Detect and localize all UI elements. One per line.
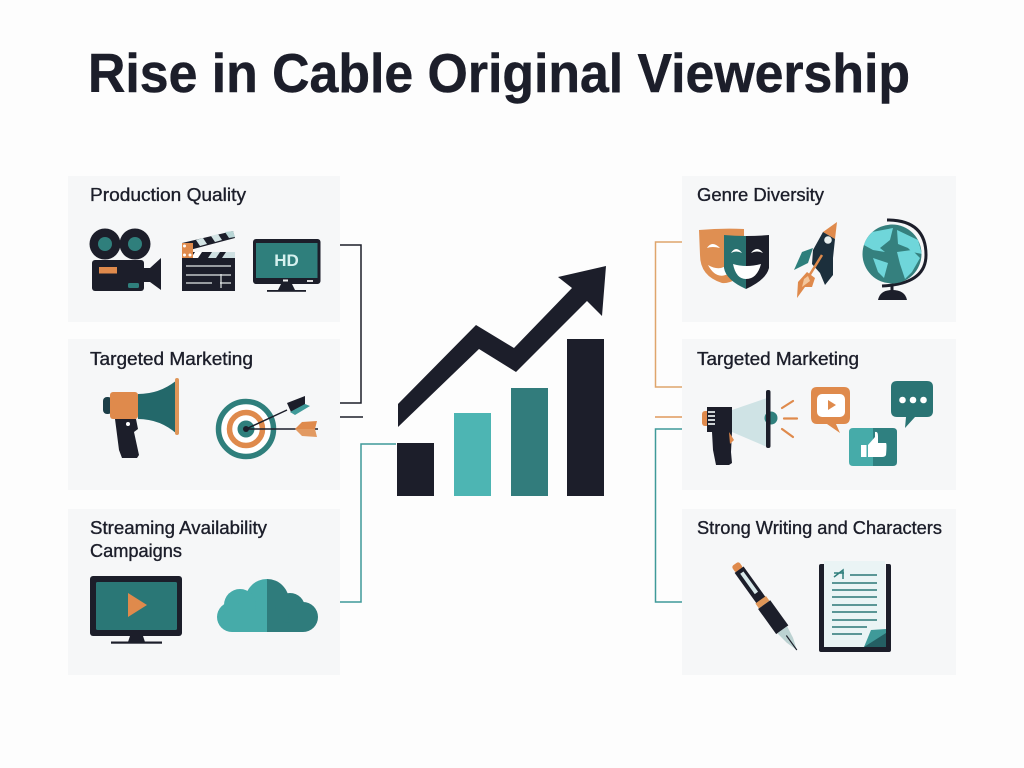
icon: HD monitor: HD <box>274 251 299 270</box>
connector: production quality to chart <box>339 245 361 403</box>
bar 1 <box>397 443 434 496</box>
icon: HD monitor <box>253 239 320 292</box>
panel: production quality <box>68 176 340 322</box>
connector: targeted marketing right <box>655 416 682 418</box>
panel: targeted marketing left <box>68 339 340 490</box>
icon: rocket <box>794 222 837 298</box>
icon: megaphone with rays <box>702 390 797 465</box>
connector: streaming to chart <box>339 444 396 602</box>
heading: genre diversity: Genre Diversity <box>697 185 824 205</box>
bar 2 <box>454 413 491 496</box>
icon: video monitor <box>90 576 182 644</box>
heading: targeted marketing: Targeted Marketing <box>90 349 253 369</box>
heading: streaming availability campaigns <box>90 518 267 561</box>
heading: production quality: Production Quality <box>90 185 246 205</box>
icon: script document <box>819 561 891 652</box>
panel: genre diversity <box>698 187 928 300</box>
icon: megaphone <box>103 378 179 458</box>
panel: strong writing and characters <box>682 509 956 675</box>
heading: streaming availability campaigns: Campaigns <box>90 541 182 561</box>
icon: thumbs up <box>849 428 897 466</box>
connector: genre diversity <box>656 242 682 387</box>
connector: targeted marketing to chart <box>339 416 363 418</box>
bar 4 <box>567 339 604 496</box>
connector: strong writing <box>656 429 682 602</box>
icon: globe <box>862 220 926 300</box>
icon: clapperboard <box>182 231 235 291</box>
arrow: upward trend <box>398 266 606 427</box>
panel: streaming availability campaigns <box>90 520 340 644</box>
icon: film camera <box>90 228 161 291</box>
heading: strong writing and characters: Strong Writing and Characters <box>697 518 942 538</box>
title: Rise in Cable Original Viewership <box>88 42 910 104</box>
icon: video bubble <box>811 387 850 433</box>
icon: target with arrows <box>218 396 318 456</box>
heading: streaming availability campaigns: Streaming Availability <box>90 518 267 538</box>
icon: theatre masks <box>699 229 769 289</box>
panel: targeted marketing right <box>682 339 956 490</box>
heading: targeted marketing: Targeted Marketing <box>697 349 859 369</box>
bar 3 <box>511 388 548 496</box>
icon: chat bubble <box>891 381 933 428</box>
icon: fountain pen <box>729 560 803 654</box>
icon: cloud <box>217 579 318 632</box>
chart: rising bars with arrow <box>397 266 606 496</box>
